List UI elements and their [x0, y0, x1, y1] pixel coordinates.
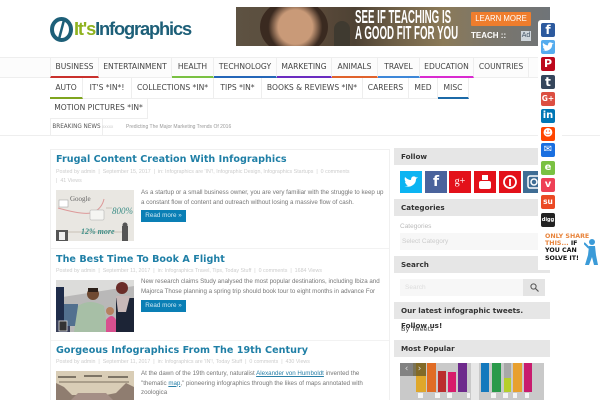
carousel previous button: ‹	[405, 364, 408, 374]
article 3 excerpt: zoologica	[141, 389, 167, 396]
sidebar: categories heading: Categories	[401, 203, 445, 212]
ad choice mark: Ad	[522, 32, 530, 39]
ad photo face	[260, 0, 328, 55]
share: digg	[541, 213, 555, 227]
share: pocket: v	[545, 179, 551, 190]
nav: med	[409, 78, 438, 99]
nav: its in: IT'S *IN*!	[90, 83, 124, 92]
share: tumblr	[541, 75, 555, 89]
article 1	[51, 150, 389, 249]
only share this promo	[538, 229, 600, 270]
main articles panel	[50, 149, 390, 400]
article 1 title: Frugal Content Creation With Infographics	[56, 154, 287, 165]
share: stumbleupon: su	[543, 197, 553, 206]
nav: education	[420, 57, 474, 78]
nav: marketing	[277, 57, 332, 78]
nav: health	[172, 57, 214, 78]
sidebar: search heading	[394, 256, 550, 273]
share: facebook: f	[545, 23, 551, 37]
article 2 excerpt: Majorca Those planning a spring trip should book tour to eight months in advance For	[141, 288, 375, 294]
article 3	[56, 345, 363, 400]
article 1 read more button	[141, 210, 186, 222]
article 1 meta: | 41 Views	[56, 178, 82, 184]
nav: misc: MISC	[444, 83, 462, 92]
article 1 meta	[56, 169, 350, 184]
sidebar: tweets heading: Our latest infographic tweets.	[401, 306, 523, 315]
categories dropdown	[400, 233, 544, 250]
sidebar: follow heading: Follow	[401, 152, 427, 161]
article 2 excerpt	[141, 278, 380, 294]
promo text: SOLVE IT!	[545, 255, 579, 262]
logo wordmark: It'sInfographics	[74, 18, 191, 39]
article 3 title: Gorgeous Infographics From The 19th Century	[56, 345, 308, 356]
search input: Search	[405, 284, 426, 291]
article 3 excerpt: At the dawn of the 19th century, naturalist Alexander von Humboldt invented the	[141, 370, 359, 377]
sidebar: social icons	[400, 171, 538, 193]
navigation menu	[0, 57, 538, 119]
nav: motion pictures	[50, 98, 148, 119]
promo text: ONLY SHARE	[545, 233, 589, 240]
categories dropdown: Select Category	[402, 238, 448, 245]
article 3 excerpt	[141, 370, 363, 396]
share: digg: digg	[542, 217, 554, 223]
article 1 thumbnail: 12% more	[81, 227, 115, 236]
nav: animals	[332, 57, 378, 78]
nav: books	[262, 78, 363, 99]
article 2 title: The Best Time To Book A Flight	[56, 254, 225, 265]
promo text: THIS... IF	[545, 240, 577, 247]
share: tumblr: t	[545, 75, 551, 89]
breaking news dots: xxxxx	[102, 124, 113, 129]
sidebar: follow heading	[394, 148, 550, 165]
nav: travel	[378, 57, 420, 78]
share: email: ✉	[544, 144, 552, 155]
share: pinterest	[541, 57, 555, 71]
share: google plus: G+	[542, 94, 554, 103]
google plus icon	[449, 171, 471, 193]
nav: education: EDUCATION	[424, 62, 469, 71]
article 1 meta: Posted by admin | September 15, 2017 | in: Infographics are 'IN'!, Infographic Design, Infographics Startups | 0 comments	[56, 169, 350, 175]
share: stumbleupon	[541, 195, 555, 209]
nav: countries: COUNTRIES	[479, 62, 523, 71]
nav: collections: COLLECTIONS *IN*	[137, 83, 208, 92]
carousel next button: ›	[418, 364, 421, 374]
nav: technology: TECHNOLOGY	[219, 62, 271, 71]
article 3 excerpt: "thematic map," pioneering infographics through the likes of maps annotated with	[141, 380, 363, 386]
article 1 thumbnail	[56, 190, 134, 241]
share: pocket	[541, 178, 555, 192]
nav: motion pictures: MOTION PICTURES *IN*	[54, 103, 143, 112]
share: email	[541, 143, 555, 157]
nav: tips: TIPS *IN*	[220, 83, 255, 92]
breaking news label	[50, 118, 103, 135]
share: evernote	[541, 161, 555, 175]
article 2 meta: Posted by admin | September 11, 2017 | in: Infographics Travel, Tips, Today Stuff | 0 comments | 1684 Views	[56, 268, 322, 274]
article 1 thumbnail: 800%	[112, 206, 133, 216]
sidebar: tweets heading	[394, 302, 550, 319]
nav: entertainment	[99, 57, 172, 78]
nav: travel: TRAVEL	[384, 62, 413, 71]
floating share bar	[538, 20, 562, 229]
article 1 excerpt: a constant flow of content and outreach without losing a massive flow of cash.	[141, 198, 354, 206]
promo text	[545, 233, 589, 262]
article 1 excerpt	[141, 189, 384, 206]
logo mark	[50, 17, 73, 42]
share: facebook	[541, 23, 555, 37]
ad logo: TEACH ::	[471, 31, 506, 40]
sidebar: most popular heading: Most Popular	[401, 344, 455, 353]
share: reddit: ☻	[543, 128, 553, 139]
nav: collections	[132, 78, 214, 99]
article 3 thumbnail	[56, 371, 134, 400]
sidebar: search heading: Search	[401, 260, 429, 269]
pinterest icon	[499, 171, 521, 193]
youtube icon	[474, 171, 496, 193]
article 2 thumbnail	[56, 280, 134, 332]
nav: tips	[214, 78, 262, 99]
ad photo background person	[334, 21, 350, 46]
twitter icon	[400, 171, 422, 193]
nav: business: BUSINESS	[56, 62, 93, 71]
facebook icon: f	[433, 174, 439, 190]
nav: business	[50, 57, 99, 78]
nav: auto	[50, 78, 83, 99]
nav: entertainment: ENTERTAINMENT	[103, 62, 167, 71]
search input	[400, 279, 523, 296]
share: twitter	[541, 40, 555, 54]
instagram icon	[523, 171, 545, 193]
most popular carousel	[400, 363, 544, 400]
nav: med: MED	[414, 83, 432, 92]
search button	[523, 279, 545, 296]
ad headline	[355, 7, 458, 42]
ad button	[471, 12, 531, 26]
nav: countries	[474, 57, 529, 78]
breaking news bar	[0, 118, 600, 136]
nav: careers	[363, 78, 409, 99]
share: evernote: e	[545, 162, 551, 173]
nav: auto: AUTO	[55, 83, 77, 92]
promo text: YOU CAN	[545, 247, 577, 254]
article 2 read more button	[141, 300, 186, 312]
tweets byline: By Tweets	[401, 325, 434, 333]
nav: health: HEALTH	[178, 62, 207, 71]
carousel next button	[413, 363, 426, 376]
share: linkedin	[541, 109, 555, 123]
nav: animals: ANIMALS	[338, 62, 371, 71]
ad headline: A GOOD FIT FOR YOU	[355, 22, 458, 42]
share: google plus	[541, 92, 555, 106]
ad headline: SEE IF TEACHING IS	[355, 7, 451, 27]
share: reddit	[541, 127, 555, 141]
google plus icon: g+	[455, 176, 465, 187]
nav: technology	[214, 57, 277, 78]
nav row 1 background	[0, 57, 550, 78]
tweets text: Follow us!	[401, 321, 442, 330]
article 1 thumbnail: Google	[70, 195, 91, 203]
breaking news label: BREAKING NEWS	[52, 124, 101, 130]
article 3 meta: Posted by admin | September 11, 2017 | in: Infographics are 'IN'!, Today Stuff | 0 comments | 430 Views	[56, 359, 310, 365]
promo figure	[584, 239, 598, 265]
nav: marketing: MARKETING	[281, 62, 327, 71]
article 2	[51, 249, 389, 341]
breaking news headline: Predicting The Major Marketing Trends Of 2016	[126, 124, 231, 130]
facebook icon	[425, 171, 447, 193]
share: pinterest: P	[544, 57, 552, 70]
article 2 read more button: Read more »	[145, 302, 182, 309]
article 1 read more button: Read more »	[145, 212, 182, 219]
article 1 excerpt: As a startup or a small business owner, you are very familiar with the struggle to keep up	[141, 189, 383, 196]
categories label: Categories	[400, 223, 431, 230]
logo	[50, 17, 192, 42]
nav: books: BOOKS & REVIEWS *IN*	[267, 83, 357, 92]
ad banner	[236, 7, 550, 46]
nav: its in	[83, 78, 132, 99]
ad choice mark	[521, 31, 531, 41]
sidebar: categories heading	[394, 199, 550, 216]
ad button: LEARN MORE	[475, 14, 527, 23]
sidebar: most popular heading	[394, 340, 550, 357]
carousel previous button	[400, 363, 413, 376]
article 2 excerpt: New research claims Study analysed the most popular destinations, including Ibiza and	[141, 278, 380, 285]
nav: misc	[438, 78, 469, 99]
share: linkedin: in	[543, 110, 553, 121]
nav: careers: CAREERS	[368, 83, 403, 92]
